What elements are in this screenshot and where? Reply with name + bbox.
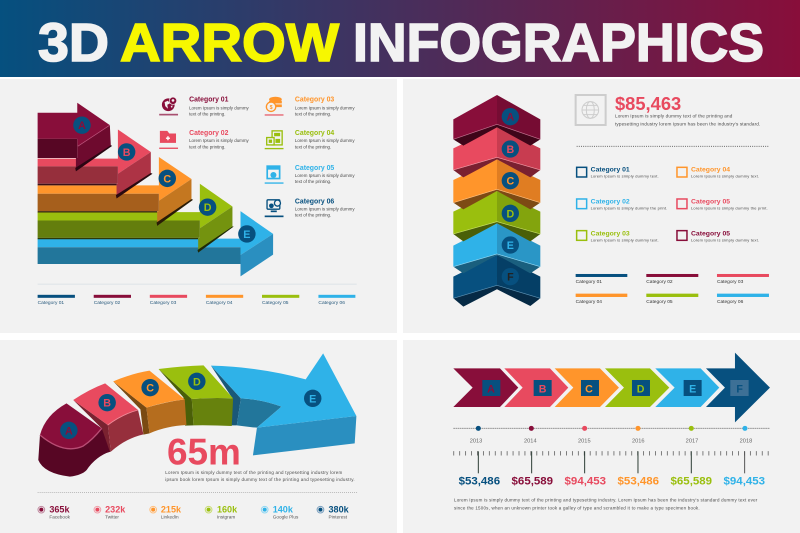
category grid: Lorem Ipsum is simply dummy the print. — [591, 206, 667, 211]
panel: curved arrow — [0, 340, 397, 533]
letter badges — [73, 116, 256, 243]
letter squares: B — [539, 383, 547, 395]
category list: Lorem Ipsum is simply dummy — [189, 138, 250, 143]
values: $94,453 — [565, 475, 606, 487]
chevron C — [453, 159, 540, 209]
timeline: 2018 — [740, 438, 752, 444]
big number: 65m — [167, 431, 241, 472]
values: $94,453 — [724, 475, 765, 487]
timeline: 2017 — [686, 438, 698, 444]
letter badges — [502, 108, 519, 285]
legend: Category 02 — [646, 279, 673, 285]
category list: text of the printing. — [189, 111, 225, 116]
letter squares: E — [689, 383, 696, 395]
icon: folder — [159, 131, 178, 149]
category grid — [577, 167, 768, 243]
letter badges: D — [506, 208, 514, 220]
panel: timeline arrows — [403, 340, 800, 533]
social stats: LinkedIn — [161, 515, 179, 520]
letter badges: F — [507, 272, 514, 284]
icon: globe and pin — [159, 97, 178, 115]
category list: Lorem Ipsum is simply dummy — [189, 105, 250, 110]
letter badges: E — [507, 240, 514, 252]
letter badges: C — [506, 176, 514, 188]
category list: Lorem Ipsum is simply dummy — [295, 173, 355, 178]
letter badges: D — [193, 376, 201, 388]
category grid: Lorem Ipsum is simply dummy text. — [591, 174, 659, 179]
legend: Category 02 — [94, 300, 121, 306]
title — [38, 13, 764, 73]
legend: Category 06 — [318, 300, 345, 306]
segment B — [73, 383, 143, 453]
timeline: 2013 — [470, 438, 482, 444]
legend: Category 03 — [150, 300, 177, 306]
description: since the 1500s, when an unknown printer took a galley of type and scrambled it to make a type specimen book. — [454, 506, 700, 511]
header banner — [0, 0, 800, 77]
letter squares: F — [736, 383, 743, 395]
intro text: typesetting industry lorem Ipsum has been the industry's standard. — [615, 122, 760, 127]
arrow B — [38, 130, 152, 198]
segment D — [159, 365, 233, 426]
letter badges: C — [163, 173, 171, 185]
social stats: 215k — [161, 505, 182, 515]
category list: Lorem Ipsum is simply dummy — [295, 207, 355, 211]
social stats: Facebook — [49, 515, 71, 520]
letter squares: C — [585, 383, 593, 395]
social stats — [38, 505, 350, 520]
letter squares: D — [637, 383, 645, 395]
category grid: Category 05 — [691, 230, 730, 237]
legend: Category 01 — [576, 279, 602, 285]
legend: Category 06 — [717, 299, 744, 305]
title: INFOGRAPHICS — [353, 13, 764, 73]
icon: globe box — [576, 95, 606, 125]
timeline: 2016 — [632, 438, 645, 444]
social stats: 232k — [105, 505, 126, 515]
letter badges: E — [243, 229, 250, 241]
icon: coins: $ — [270, 105, 273, 111]
chevron A — [453, 95, 540, 146]
letter badges: A — [78, 120, 86, 132]
social stats: 365k — [49, 505, 71, 515]
category grid: Lorem Ipsum is simply dummy text. — [591, 238, 659, 243]
legend — [38, 295, 355, 306]
legend — [576, 274, 769, 305]
social stats: 160k — [217, 505, 238, 515]
title: ARROW — [120, 13, 339, 73]
letter badges: E — [309, 393, 316, 405]
timeline: 2015 — [578, 438, 591, 444]
intro text: Lorem Ipsum is simply dummy text of the printing and — [615, 114, 733, 119]
letter badges: B — [123, 147, 131, 159]
icon: monitor gears — [265, 200, 283, 217]
chevron F — [453, 255, 540, 307]
letter badges: B — [506, 144, 514, 156]
arrow row — [453, 353, 770, 422]
category grid: Category 05 — [691, 199, 730, 206]
letter badges: B — [103, 398, 111, 410]
category grid: Lorem Ipsum is simply dummy text. — [691, 238, 759, 243]
description: ipsum book lorem Ipsum is simply dummy text of the printing and typesetting industry. — [165, 477, 355, 482]
category list: text of the printing. — [189, 144, 225, 149]
letter badges: A — [506, 112, 514, 124]
values: $65,589 — [512, 475, 553, 487]
arrow C — [38, 157, 193, 226]
legend: Category 05 — [646, 299, 673, 305]
category list: text of the printing. — [295, 213, 331, 218]
legend: Category 01 — [38, 300, 64, 306]
panel: stepped 3D arrows — [0, 79, 397, 333]
big number: $85,463 — [615, 93, 681, 114]
category list: Category 01 — [189, 97, 229, 104]
legend: Category 04 — [206, 300, 233, 306]
letter squares: A — [487, 383, 495, 395]
segment A — [38, 403, 110, 477]
letter badges: C — [146, 383, 154, 395]
category list: Category 04 — [295, 130, 334, 137]
timeline — [453, 426, 770, 444]
values: $65,589 — [671, 475, 712, 487]
category list: Lorem Ipsum is simply dummy — [295, 138, 355, 143]
values: $53,486 — [459, 475, 500, 487]
letter squares — [482, 380, 749, 396]
description: Lorem Ipsum is simply dummy text of the printing and typesetting industry lorem — [165, 470, 343, 475]
tick ruler — [453, 451, 770, 473]
arrow A — [38, 103, 112, 171]
letter badges — [60, 373, 321, 439]
icon: coins — [265, 97, 283, 116]
category grid: Lorem Ipsum is simply dummy text. — [691, 174, 759, 179]
title: 3D — [38, 13, 109, 73]
category list: Category 05 — [295, 165, 334, 172]
icon: browser gear — [265, 165, 283, 184]
chevron E — [453, 223, 540, 273]
arrow E — [38, 211, 273, 276]
category grid: Category 04 — [691, 167, 730, 174]
social stats: 380k — [329, 505, 350, 515]
category grid: Lorem Ipsum is simply dummy the print. — [691, 206, 768, 211]
letter badges: A — [65, 425, 73, 437]
timeline: 2014 — [524, 438, 537, 444]
chevron D — [453, 191, 540, 241]
category list: Lorem Ipsum is simply dummy — [295, 105, 355, 110]
legend: Category 05 — [262, 300, 289, 306]
legend: Category 03 — [717, 279, 744, 285]
description: Lorem Ipsum is simply dummy text of the printing and typesetting industry. Lorem Ipsum has been the industry's standard dummy text ever — [454, 497, 758, 502]
values — [459, 475, 765, 487]
category grid: Category 03 — [591, 230, 630, 237]
intro text — [615, 114, 760, 127]
social stats: Google Plus — [273, 515, 299, 520]
letter badges: D — [204, 202, 212, 214]
category list: Category 02 — [189, 130, 229, 137]
segment E — [211, 353, 356, 455]
panel: stacked chevrons — [403, 79, 800, 333]
segment C — [113, 371, 186, 435]
social stats: 140k — [273, 505, 294, 515]
social stats: Instgram — [217, 515, 235, 520]
category list — [189, 97, 355, 218]
category list: text of the printing. — [295, 179, 331, 184]
icon: buildings — [265, 131, 283, 149]
category list: text of the printing. — [295, 111, 331, 116]
category list: text of the printing. — [295, 144, 331, 149]
description — [454, 497, 758, 511]
description — [165, 470, 355, 482]
social stats: Twitter — [105, 515, 119, 520]
category list: Category 06 — [295, 198, 334, 205]
social stats: Pinterest — [329, 515, 348, 520]
category grid: Category 02 — [591, 199, 630, 206]
legend: Category 04 — [576, 299, 602, 305]
arrow D — [38, 184, 234, 253]
chevron B — [453, 127, 540, 177]
category grid: Category 01 — [591, 167, 630, 174]
category list: Category 03 — [295, 97, 334, 104]
values: $53,486 — [618, 475, 659, 487]
